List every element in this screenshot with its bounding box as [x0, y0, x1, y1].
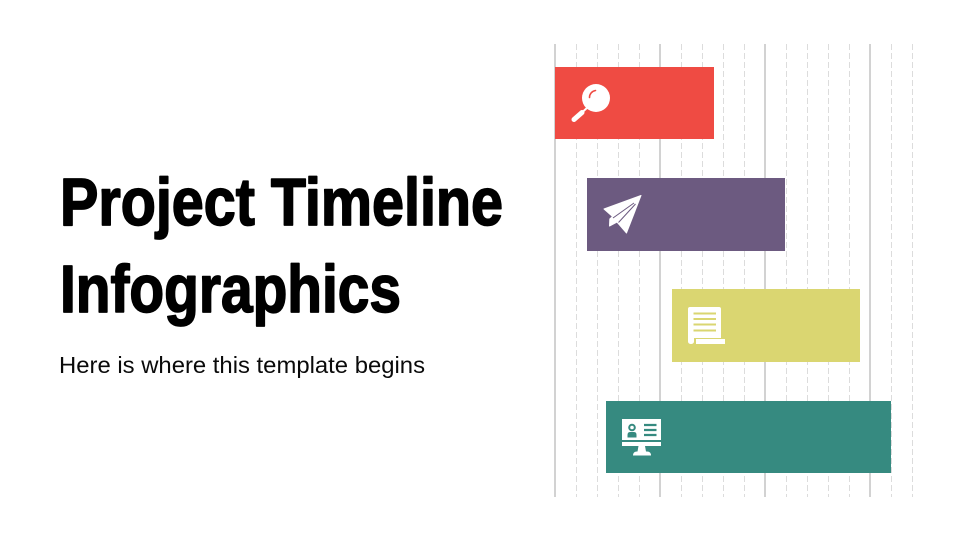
icon: paper plane	[604, 196, 641, 233]
title	[60, 165, 503, 327]
purple bar	[587, 178, 785, 251]
timeline grid	[555, 44, 912, 497]
red bar	[555, 67, 714, 139]
subtitle: Here is where this template begins	[59, 352, 425, 378]
yellow bar	[672, 289, 860, 362]
teal bar	[606, 401, 891, 473]
title: Infographics	[60, 252, 401, 327]
icon: document scroll	[688, 307, 725, 344]
icon: magnifying glass	[574, 84, 610, 120]
icon: monitor with profile	[622, 419, 661, 456]
title: Project Timeline	[60, 165, 503, 240]
